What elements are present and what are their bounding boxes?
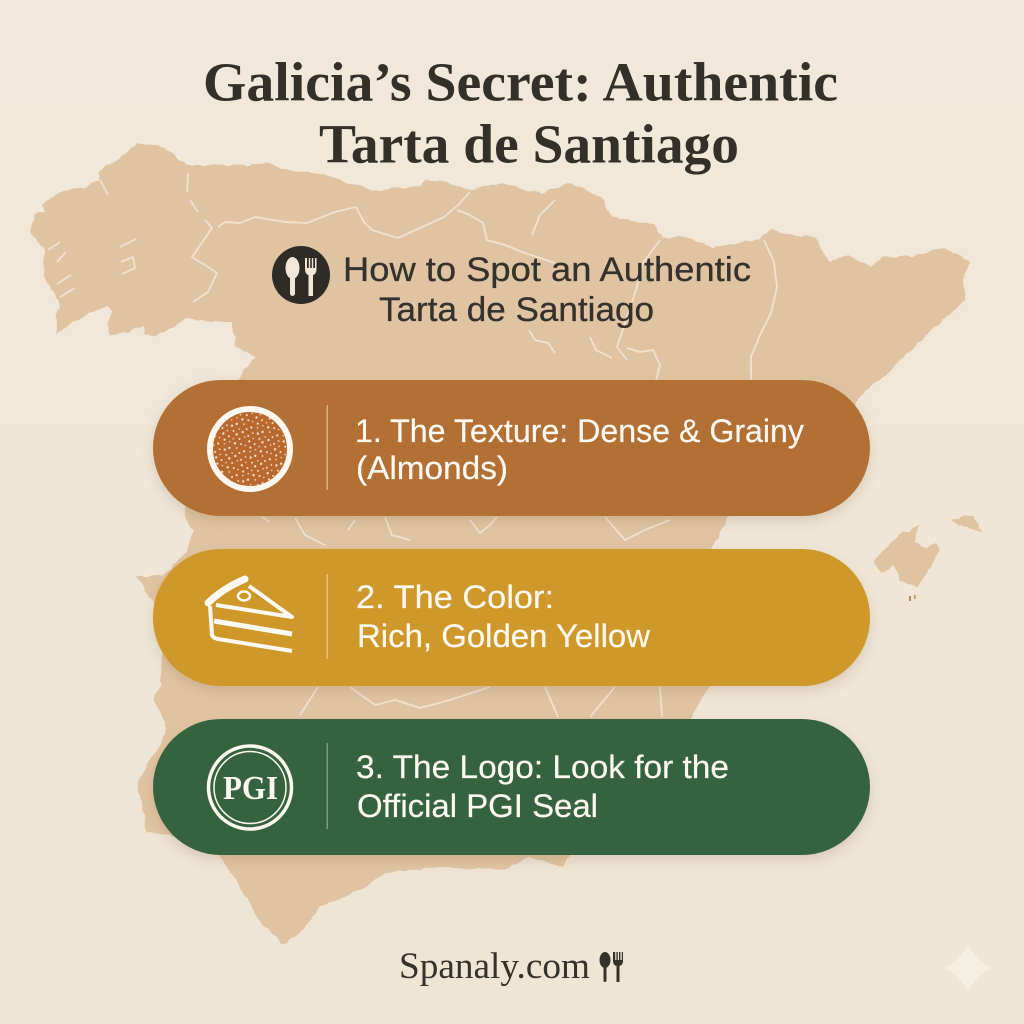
icon: footer spoon and fork: [600, 952, 623, 982]
panel: logo: [153, 719, 870, 855]
title: Tarta de Santiago: [319, 114, 739, 176]
icon: sparkle: [944, 944, 992, 992]
color text: [356, 579, 651, 654]
subheading with cutlery icon: [272, 246, 751, 329]
texture text: [355, 413, 804, 486]
small islets: [909, 595, 916, 601]
logo text: Official PGI Seal: [357, 788, 598, 824]
logo text: 3. The Logo: Look for the: [356, 749, 729, 785]
panel: color: [153, 549, 870, 686]
footer brand: Spanaly.com: [399, 946, 590, 987]
title: Galicia’s Secret: Authentic: [203, 52, 838, 114]
color text: 2. The Color:: [356, 579, 554, 615]
color text: Rich, Golden Yellow: [357, 618, 651, 654]
subheading text: How to Spot an Authentic: [343, 251, 751, 289]
icon: spoon and fork badge: [272, 246, 330, 304]
icon: grainy almond texture: [210, 409, 290, 489]
title: [203, 52, 838, 176]
panel: texture: [153, 380, 870, 516]
texture text: 1. The Texture: Dense & Grainy: [355, 413, 804, 449]
logo text: [356, 749, 729, 824]
icon: PGI seal: [208, 746, 292, 829]
icon: PGI seal: PGI: [223, 770, 278, 807]
texture text: (Almonds): [356, 450, 508, 486]
rias and rivers: [48, 173, 777, 717]
subheading text: Tarta de Santiago: [379, 291, 654, 329]
icon: cake slice: [208, 579, 292, 651]
background map of Spain: [30, 144, 983, 945]
subheading text: [343, 251, 751, 329]
